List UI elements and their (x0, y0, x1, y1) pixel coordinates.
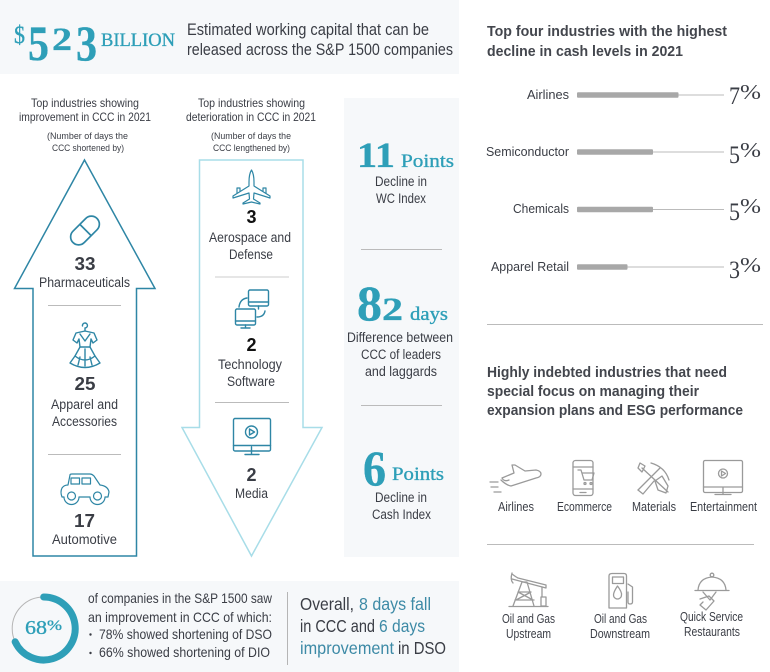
stat: 82 days (347, 275, 453, 379)
down arrow: deteriorating industries: 2 (246, 335, 257, 355)
headline figure: 2 (52, 22, 72, 58)
text: improvement breakdown: 78% showed shortening of DSO (99, 626, 272, 642)
text: overall callout: Overall, (300, 594, 354, 614)
heading: deterioration (186, 96, 316, 154)
up arrow: improving industries: Automotive (52, 532, 117, 547)
stat: 6 points: 6 (363, 440, 386, 496)
headline description: Estimated working capital that can be (187, 20, 429, 39)
icon: car (61, 474, 109, 505)
headline figure: 3 (76, 15, 97, 71)
text: improvement breakdown (88, 590, 273, 660)
industry: quick service restaurants (680, 573, 743, 639)
ring chart: 68%: % (47, 618, 62, 634)
stat: 6 points: Cash Index (372, 507, 431, 522)
ring chart: 68% (12, 597, 75, 660)
heading: cash decline: decline in cash levels in 2021 (487, 43, 683, 60)
bar: chemicals: 5 (729, 199, 740, 226)
heading: improvement: Top industries showing (31, 96, 139, 110)
stat: 11 points: WC Index (376, 191, 426, 206)
up arrow: improving industries: 33 (74, 254, 96, 274)
down arrow: deteriorating industries: Aerospace and (209, 230, 291, 245)
stat: 11 points (357, 135, 454, 206)
bar: chemicals (513, 194, 761, 226)
heading: deterioration: CCC lengthened by) (213, 143, 290, 154)
heading: improvement (19, 96, 151, 154)
headline figure: 5 (28, 15, 49, 71)
stat: 6 points (363, 440, 444, 522)
industry: oil and gas downstream: Oil and Gas (594, 612, 647, 626)
headline figure: $ (14, 22, 25, 49)
bar: semiconductor: Semiconductor (486, 144, 570, 159)
stat: 6 points: Decline in (375, 490, 427, 505)
up arrow: improving industries: 17 (74, 511, 95, 531)
bar: chemicals: % (740, 194, 761, 218)
text: improvement breakdown: an improvement in CCC of which: (88, 609, 272, 625)
heading: deterioration: (Number of days the (211, 131, 291, 142)
bar: chemicals: Chemicals (513, 201, 569, 216)
up arrow: improving industries: Apparel and (51, 397, 118, 412)
icon: media screen (234, 418, 270, 454)
down arrow: deteriorating industries: Defense (229, 247, 273, 262)
industry: oil and gas downstream: Downstream (590, 627, 650, 641)
industry: ecommerce (557, 460, 612, 514)
up arrow: improving industries: Pharmaceuticals (39, 275, 130, 290)
heading: indebted industries: expansion plans and ESG performance (487, 402, 743, 419)
heading: indebted industries: special focus on managing their (487, 383, 699, 400)
stat: 6 points: Points (392, 464, 444, 485)
heading: improvement: CCC shortened by) (52, 143, 124, 154)
up arrow: improving industries: Accessories (52, 414, 117, 429)
heading: cash decline (487, 23, 727, 60)
industry: quick service restaurants: Quick Service (680, 610, 743, 624)
industry: entertainment: Entertainment (690, 500, 757, 514)
bar: apparel retail: % (740, 253, 761, 277)
heading: improvement: improvement in CCC in 2021 (19, 110, 151, 124)
bar: airlines (527, 80, 761, 110)
headline description: released across the S&P 1500 companies (187, 40, 453, 59)
down arrow: deteriorating industries: Media (235, 486, 268, 501)
text: overall callout (300, 594, 446, 658)
heading: improvement: (Number of days the (47, 131, 128, 142)
industry: quick service restaurants: Restaurants (684, 625, 740, 639)
heading: cash decline: Top four industries with the highest (487, 23, 727, 40)
text: overall callout: improvement (300, 638, 394, 658)
stat: 82 days: Difference between (347, 330, 453, 345)
panel: key statistics (344, 98, 459, 557)
industry: ecommerce: Ecommerce (557, 500, 612, 514)
icon: swapping monitors (236, 290, 268, 328)
industry: materials: Materials (632, 500, 676, 514)
industry: materials (632, 463, 676, 514)
text: improvement breakdown: of companies in the S&P 1500 saw (88, 590, 273, 606)
bar: airlines: % (740, 80, 761, 104)
industry: airlines: Airlines (498, 500, 534, 514)
bar: semiconductor: % (740, 138, 761, 162)
text: overall callout: 8 days fall (359, 594, 431, 614)
headline figure (14, 15, 175, 71)
text: overall callout: 6 days (379, 616, 425, 636)
stat: 11 points: 11 (357, 135, 395, 175)
heading: indebted industries: Highly indebted industries that need (487, 364, 727, 381)
bar: apparel retail (491, 253, 761, 284)
text: overall callout: in DSO (398, 638, 446, 658)
bar: airlines: 7 (729, 83, 740, 110)
text: improvement breakdown: 66% showed shortening of DIO (99, 644, 270, 660)
icon: pill (67, 213, 103, 248)
industry: entertainment (690, 460, 757, 514)
icon: airplane (233, 170, 270, 204)
headline description (187, 20, 453, 59)
up arrow: improving industries: 25 (74, 374, 96, 394)
industry: oil and gas upstream: Upstream (506, 627, 551, 641)
bar: apparel retail: Apparel Retail (491, 259, 569, 274)
heading: deterioration: deterioration in CCC in 2021 (186, 110, 316, 124)
bar: semiconductor (486, 138, 761, 169)
heading: deterioration: Top industries showing (198, 96, 305, 110)
bar chart: cash decline by industry (486, 80, 761, 284)
panel: S&P 1500 summary (0, 581, 459, 672)
stat: 82 days: and laggards (365, 364, 437, 379)
up arrow: improving industries (14, 160, 155, 556)
stat: 82 days: 8 (357, 275, 382, 331)
panel: headline banner (0, 0, 459, 74)
industry: oil and gas upstream (502, 573, 555, 641)
down arrow: deteriorating industries: Software (227, 374, 275, 389)
stat: 82 days: CCC of leaders (361, 347, 441, 362)
text: overall callout: in CCC and (300, 616, 375, 636)
stat: 82 days: 2 (382, 292, 403, 328)
industry: airlines (490, 465, 541, 514)
headline figure: BILLION (101, 30, 175, 51)
bar: airlines: Airlines (527, 87, 569, 102)
ring chart: 68%: 68 (25, 617, 47, 639)
icon: dress (70, 323, 100, 368)
industry: oil and gas downstream (590, 574, 650, 641)
stat: 11 points: Decline in (375, 174, 427, 189)
down arrow: deteriorating industries: 3 (246, 207, 257, 227)
industry: oil and gas upstream: Oil and Gas (502, 612, 555, 626)
down arrow: deteriorating industries: Technology (218, 357, 282, 372)
stat: 11 points: Points (401, 151, 454, 172)
down arrow: deteriorating industries (182, 160, 322, 556)
down arrow: deteriorating industries: 2 (246, 465, 257, 485)
bar: semiconductor: 5 (729, 142, 740, 169)
stat: 82 days: days (410, 304, 448, 325)
bar: apparel retail: 3 (729, 257, 740, 284)
heading: indebted industries (487, 364, 743, 419)
